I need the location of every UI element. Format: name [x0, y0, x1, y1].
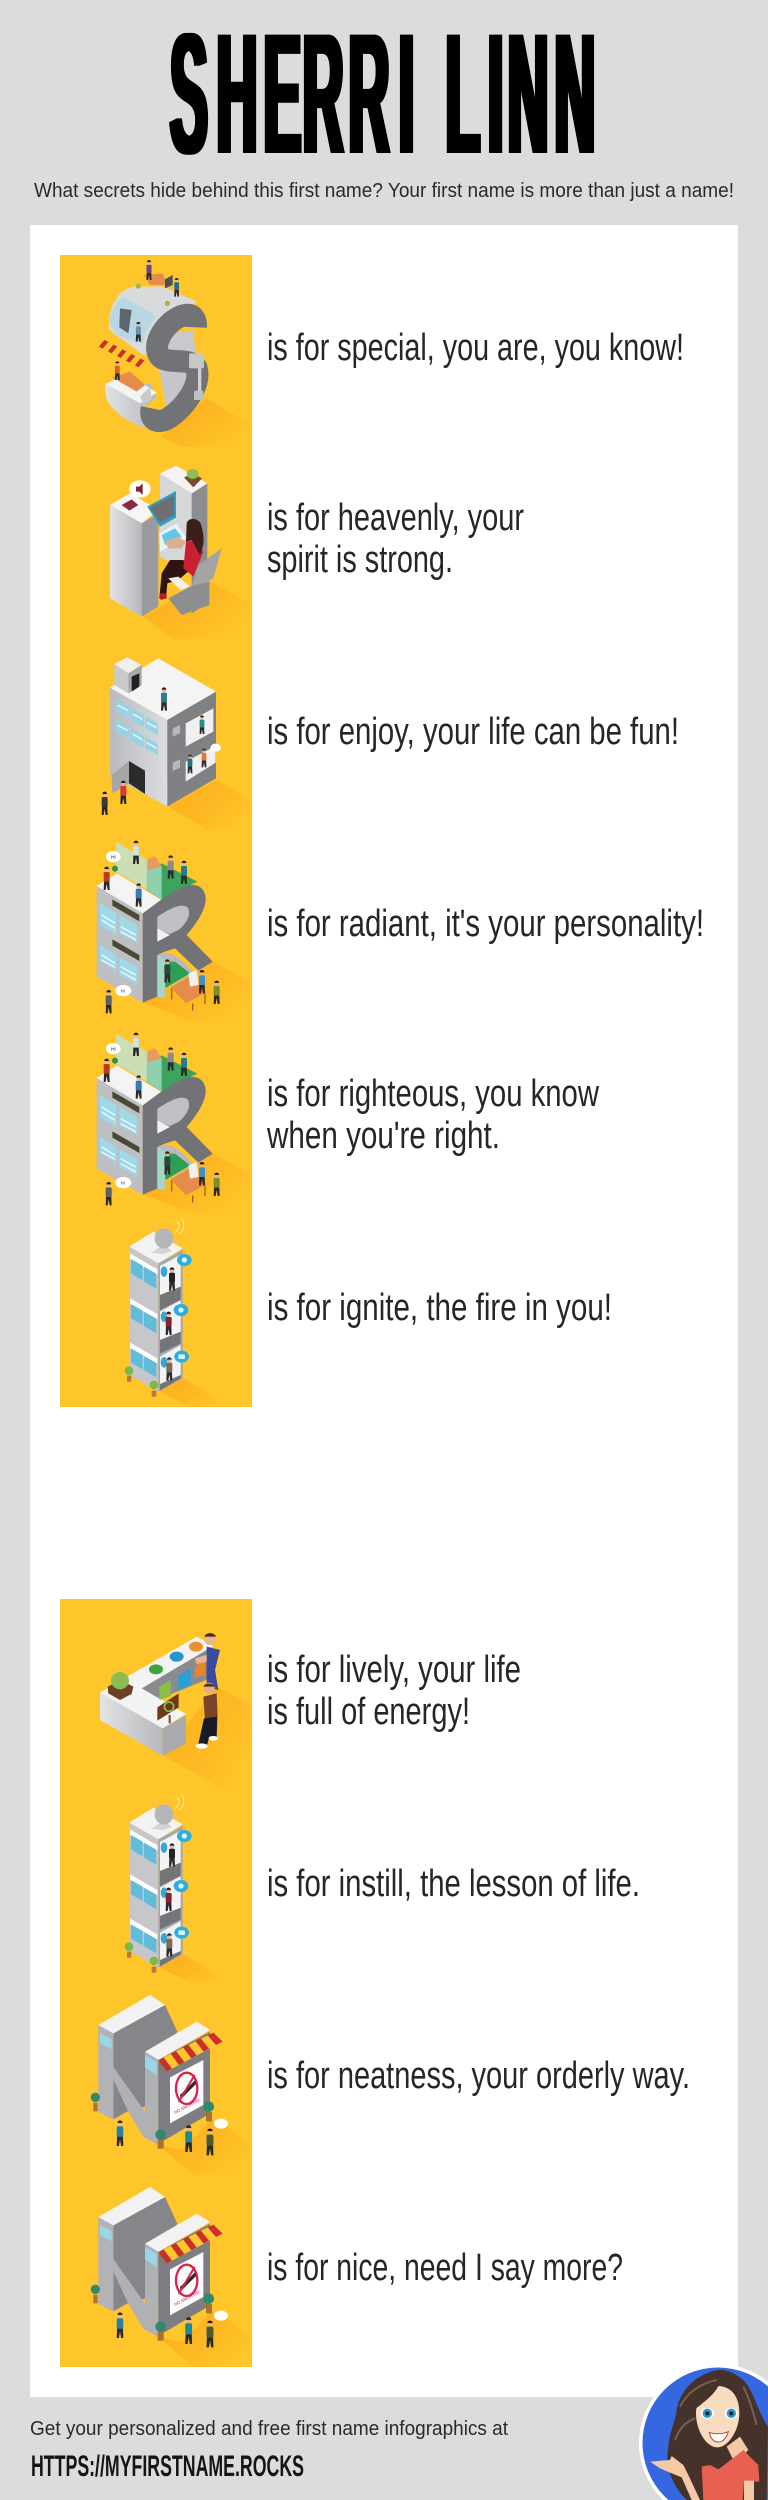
footer text: Get your personalized and free first name infographics at [30, 2418, 508, 2440]
panel: yellow illustrations S H E R R I [60, 255, 252, 1407]
text: H line 2: spirit is strong. [267, 539, 453, 581]
icon: letter N building (first) [91, 1995, 252, 2175]
text: R righteous line 2: when you're right. [266, 1115, 500, 1157]
icon: letter S building [99, 260, 252, 447]
icon: letter E office building [102, 657, 252, 832]
icon: letter I tower [124, 1794, 210, 1982]
icon: letter I tower [124, 1218, 209, 1406]
icon: letter H with woman at desk [110, 466, 252, 639]
icon: letter R building (first) [97, 841, 252, 1023]
icon: letter N building (second) [91, 2187, 252, 2367]
text: L line 1: is for lively, your life [267, 1649, 521, 1691]
avatar: woman in blue circle [639, 2364, 768, 2500]
text: N nice: is for nice, need I say more? [267, 2247, 623, 2289]
icon: letter L recycling counter [100, 1633, 252, 1791]
panel: yellow illustrations L I N N [60, 1599, 252, 2367]
icon: letter R building (second) [97, 1033, 252, 1215]
text: H line 1: is for heavenly, your [267, 497, 524, 539]
text: I ignite: is for ignite, the fire in you! [267, 1287, 612, 1329]
text: I instill: is for instill, the lesson of life. [267, 1863, 640, 1905]
text: L line 2: is full of energy! [267, 1691, 470, 1733]
footer link: HTTPS://MYFIRSTNAME.ROCKS [31, 2450, 304, 2483]
title: SHERRI LINN [170, 0, 595, 191]
text: R righteous line 1: is for righteous, you know [267, 1073, 599, 1115]
subtitle: What secrets hide behind this first name? Your first name is more than just a name! [34, 180, 734, 202]
